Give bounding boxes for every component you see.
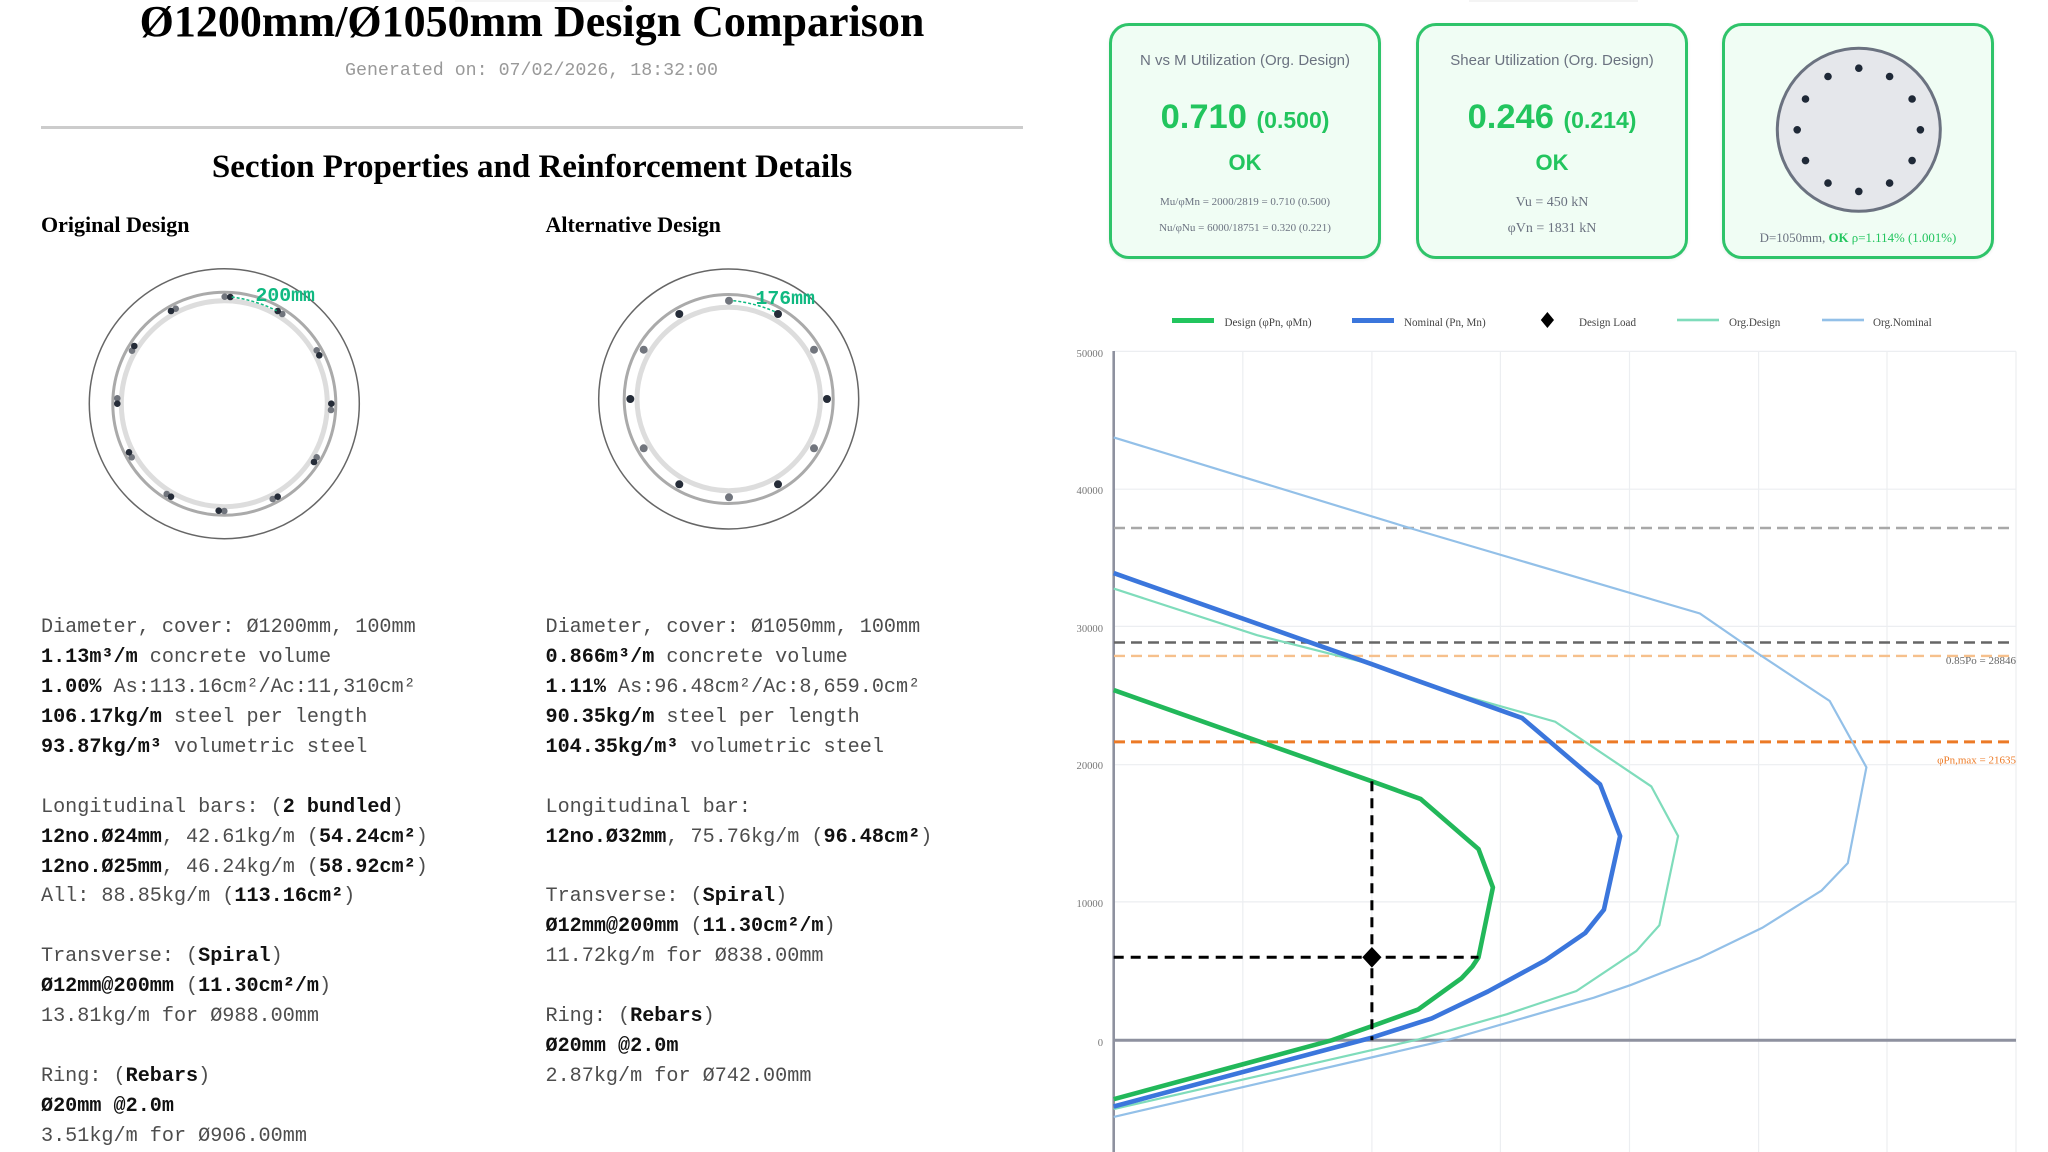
column heading: alternative design: Alternative Design (546, 212, 721, 236)
limit labels: 0.85Po = 28846 (1946, 655, 2016, 667)
y-axis labels (1077, 349, 1103, 1049)
section heading: Section Properties and Reinforcement Details (212, 148, 852, 184)
panel: N vs M utilization (1109, 22, 1381, 258)
shear capacity: φVn = 1831 kN (1508, 220, 1596, 236)
panel: section preview (1722, 22, 1994, 258)
interaction chart (1076, 349, 2016, 1152)
curve: nominal (1114, 573, 1620, 1106)
legend: Design Load (1579, 317, 1636, 329)
section diagram: original design (88, 268, 360, 540)
y-axis labels: 20000 (1077, 761, 1103, 772)
icon: column section (1776, 46, 1942, 213)
status: OK (1536, 150, 1568, 174)
curve: org design (1114, 589, 1678, 1109)
legend: Design (φPn, φMn) (1224, 317, 1312, 329)
text block: original design properties: Diameter, cover: Ø1200mm, 100mm 1.13m³/m concrete volume 1.00% As:113.16cm²/Ac:11,310cm² 106.17kg/m steel per length 93.87kg/m³ volumetric steel Longitudinal bars: (2 bundled) 12no.Ø24mm, 42.61kg/m (54.24cm²) 12no.Ø25mm, 46.24kg/m (58.92cm²) All: 88.85kg/m (113.16cm²) Transverse: (Spiral) Ø12mm@200mm (11.30cm²/m) 13.81kg/m for Ø988.00mm Ring: (Rebars) Ø20mm @2.0m 3.51kg/m for Ø906.00mm (41, 616, 428, 1148)
section diagram: alternative design (598, 268, 860, 530)
status: OK (1228, 150, 1262, 174)
curve: design (1114, 690, 1493, 1099)
legend: Org.Nominal (1873, 317, 1932, 329)
divider (41, 126, 1023, 128)
column heading: original design: Original Design (41, 212, 190, 236)
y-axis labels: 50000 (1077, 349, 1103, 360)
legend: Nominal (Pn, Mn) (1404, 317, 1486, 329)
panel: shear utilization (1416, 22, 1688, 258)
limit lines (1114, 528, 2013, 742)
section diagram: original design: 200mm (256, 285, 315, 307)
design load guides (1114, 781, 1478, 1040)
moment ratio: Mu/φMn = 2000/2819 = 0.710 (0.500) (1160, 196, 1330, 208)
text block: alternative design properties: Diameter, cover: Ø1050mm, 100mm 0.866m³/m concrete volume 1.11% As:96.48cm²/Ac:8,659.0cm² 90.35kg/m steel per length 104.35kg/m³ volumetric steel Longitudinal bar: 12no.Ø32mm, 75.76kg/m (96.48cm²) Transverse: (Spiral) Ø12mm@200mm (11.30cm²/m) 11.72kg/m for Ø838.00mm Ring: (Rebars) Ø20mm @2.0m 2.87kg/m for Ø742.00mm (546, 616, 932, 1088)
utilization value: 0.710 (0.500) (1161, 98, 1329, 136)
curve: org nominal (1114, 437, 1866, 1117)
legend (1172, 312, 1932, 329)
axes (1114, 351, 2016, 1152)
card title: Shear Utilization (Org. Design) (1450, 52, 1654, 68)
y-axis labels: 30000 (1077, 624, 1103, 635)
y-axis labels: 10000 (1077, 899, 1103, 910)
y-axis labels: 40000 (1077, 486, 1103, 497)
legend: Org.Design (1729, 317, 1781, 329)
generated timestamp: Generated on: 07/02/2026, 18:32:00 (345, 61, 718, 81)
section diagram: alternative design: 176mm (756, 288, 815, 310)
design load marker (1362, 947, 1382, 968)
interaction chart: φPn,max = 21635 (1937, 754, 2016, 766)
utilization value: 0.246 (0.214) (1468, 98, 1636, 136)
section caption: D=1050mm, OK ρ=1.114% (1.001%) (1760, 230, 1956, 244)
y-axis labels: 0 (1098, 1038, 1103, 1049)
card title: N vs M Utilization (Org. Design) (1140, 52, 1350, 68)
axial ratio: Nu/φNu = 6000/18751 = 0.320 (0.221) (1159, 222, 1331, 234)
shear demand: Vu = 450 kN (1516, 194, 1588, 210)
